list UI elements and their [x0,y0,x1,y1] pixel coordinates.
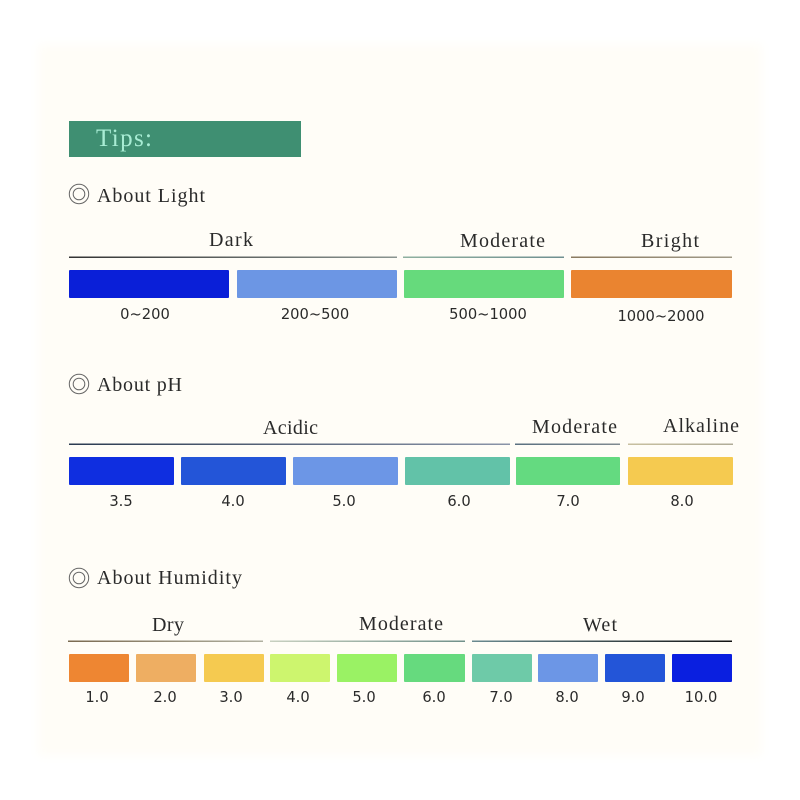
value labels: pH: 3.5 [109,493,133,510]
category labels: light: Moderate [460,230,545,252]
color bars: light [69,270,732,298]
value labels: humidity: 9.0 [621,689,645,706]
value labels: humidity: 7.0 [489,689,513,706]
value labels: pH: 8.0 [670,493,694,510]
category labels: light: Dark [209,229,253,251]
heading: About pH: About pH [97,374,182,396]
heading: About Light: About Light [97,185,205,207]
category labels: humidity: Moderate [359,613,443,635]
value labels: pH: 4.0 [221,493,245,510]
value labels: humidity: 8.0 [555,689,579,706]
value labels: pH: 7.0 [556,493,580,510]
section: About Humidity [68,567,732,706]
value labels: light: 1000~2000 [617,308,705,325]
value labels: light: 0~200 [120,306,170,323]
value labels: humidity: 5.0 [352,689,376,706]
category labels: pH: Moderate [532,416,617,438]
value labels: humidity: 1.0 [85,689,109,706]
color bars: humidity [69,654,732,682]
category labels: light: Bright [641,230,699,252]
category labels: pH [263,415,739,439]
value labels: humidity: 2.0 [153,689,177,706]
category labels: pH: Alkaline [663,415,739,437]
section: About pH [69,374,739,510]
category labels: humidity [152,613,617,636]
heading: About Humidity: About Humidity [97,567,242,589]
value labels: light: 200~500 [281,306,349,323]
category labels: humidity: Dry [152,614,184,636]
value labels: humidity [85,689,717,706]
value labels: humidity: 10.0 [685,689,717,706]
value labels: light [120,306,705,325]
value labels: pH: 5.0 [332,493,356,510]
title banner: Tips [69,121,301,157]
value labels: light: 500~1000 [449,306,527,323]
category labels: humidity: Wet [583,614,617,636]
category labels: pH: Acidic [263,417,318,439]
value labels: humidity: 6.0 [422,689,446,706]
color bars: pH [69,457,733,485]
section: About Light [69,184,732,325]
value labels: humidity: 4.0 [286,689,310,706]
value labels: humidity: 3.0 [219,689,243,706]
value labels: pH [109,493,694,510]
title banner: Tips: Tips: [96,125,152,152]
category labels: light [209,229,699,252]
value labels: pH: 6.0 [447,493,471,510]
